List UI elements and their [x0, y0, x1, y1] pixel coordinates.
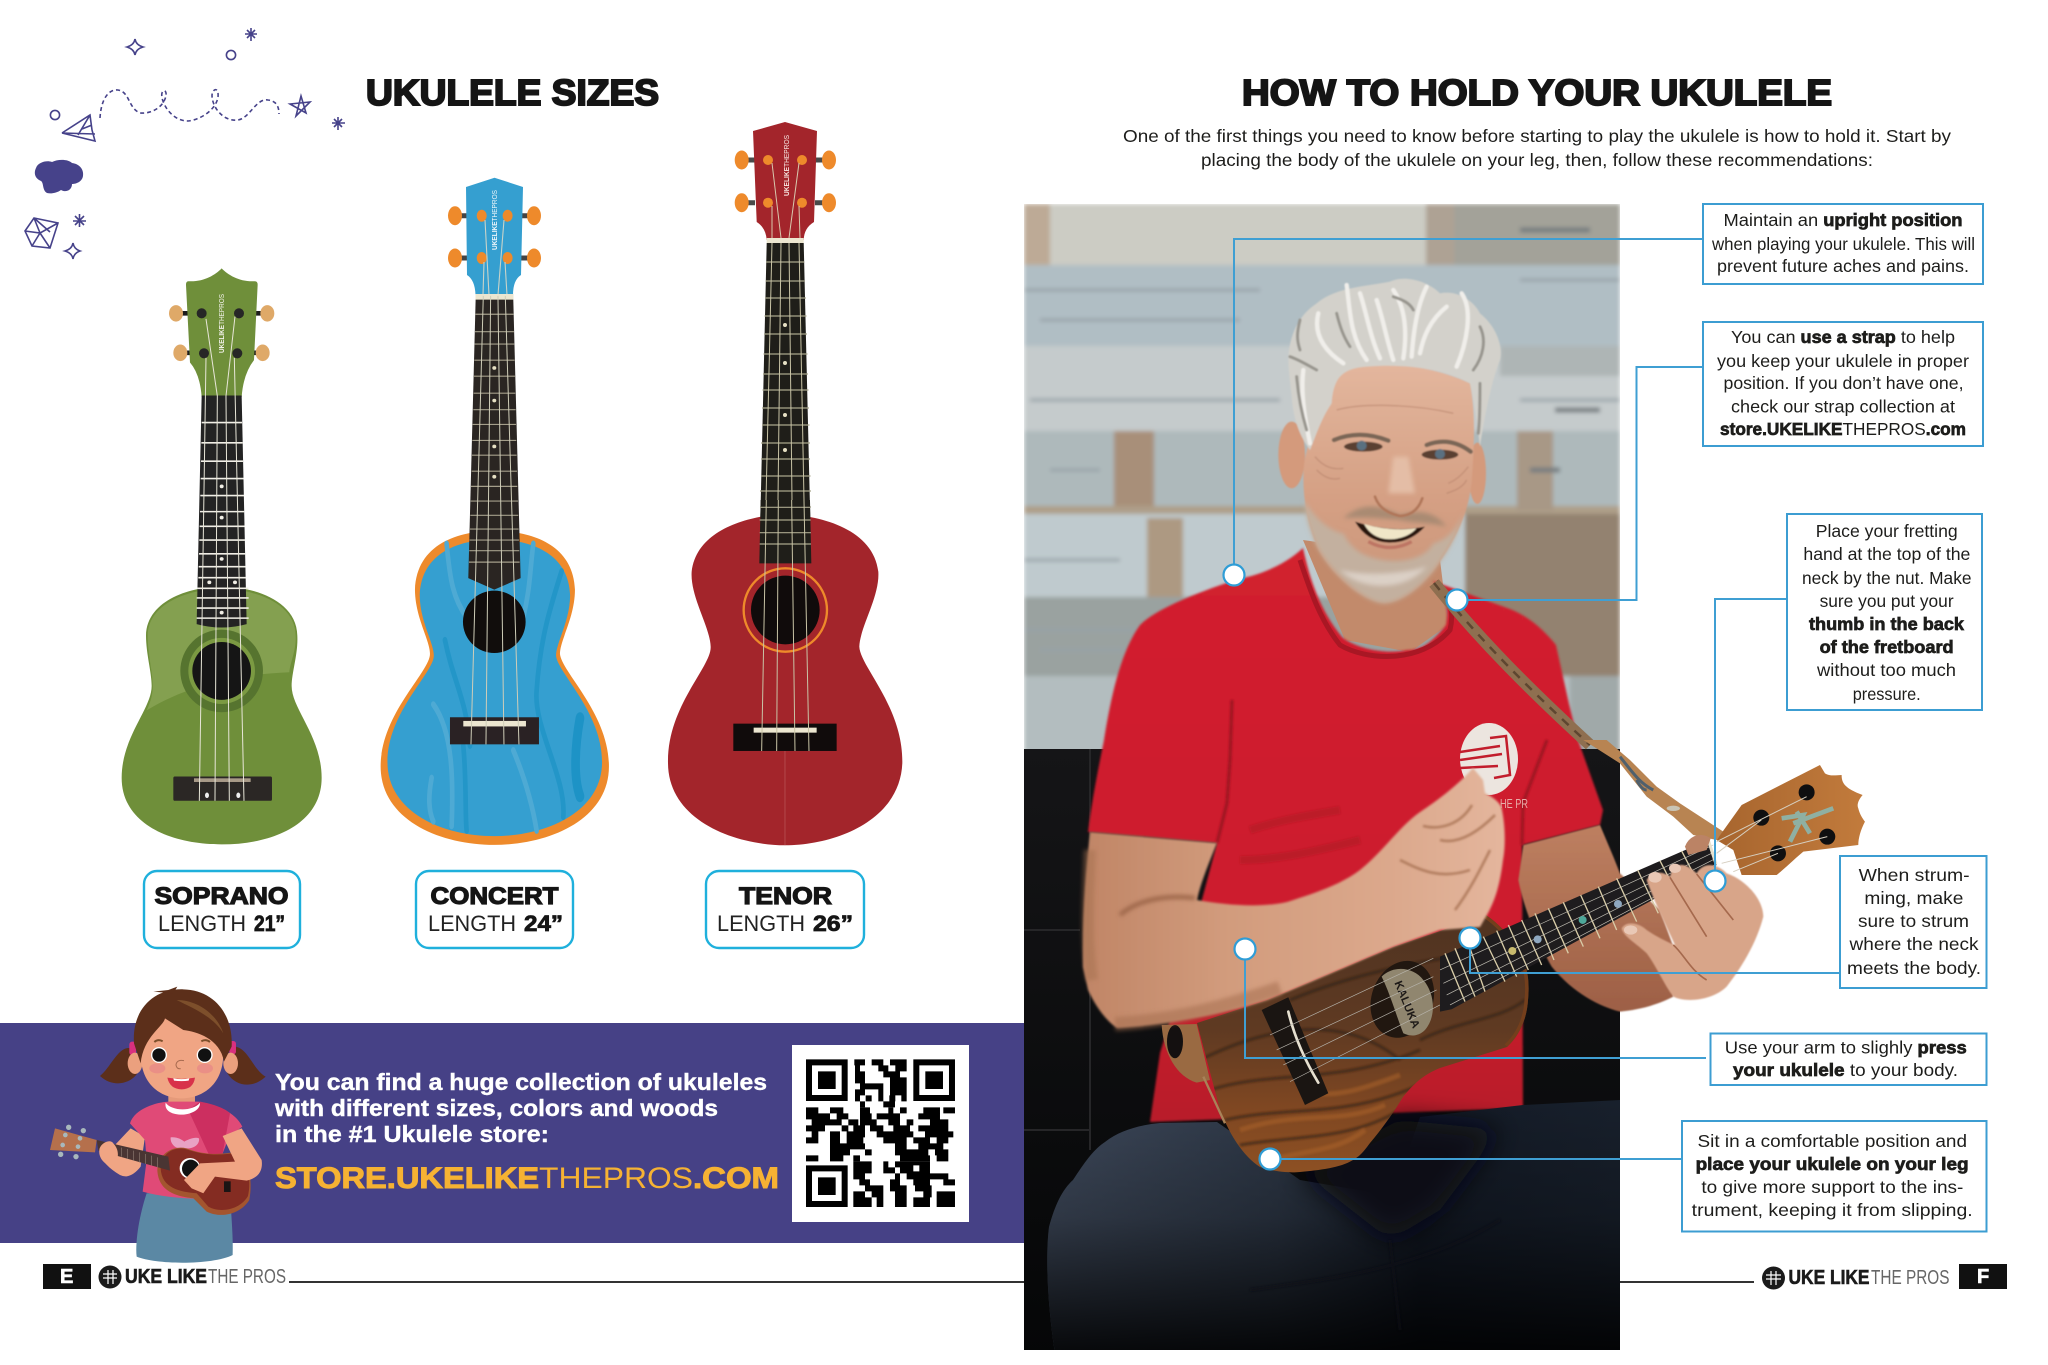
size label: tenor: TENOR: [739, 883, 832, 910]
size label: soprano: SOPRANO: [154, 883, 288, 910]
headstock: [466, 178, 523, 295]
finger gaps: [1670, 874, 1733, 980]
icon: star outline: [290, 96, 310, 116]
bow: [171, 1137, 199, 1148]
banner text: with different sizes, colors and woods: [274, 1095, 718, 1121]
heading: ukulele sizes: UKULELE SIZES: [366, 72, 659, 113]
strumming hand detail: [1400, 805, 1495, 910]
callout: leg: [1682, 1121, 1986, 1232]
headstock brand: UKELIKETHEPROS: [219, 294, 226, 353]
body wood grain: [1200, 913, 1529, 1160]
hair ties: [129, 1041, 236, 1055]
nose: [1375, 457, 1422, 516]
ukulele neck: [97, 1140, 170, 1171]
decorative doodles: [25, 28, 345, 259]
marker dots: [1224, 564, 1726, 1170]
tuning pegs: [735, 150, 836, 212]
icon: cloud: [35, 160, 83, 193]
intro paragraph: One of the first things you need to know before starting to play the ukulele is how to hold it. Start by: [1123, 126, 1951, 146]
shirt: [130, 1102, 242, 1199]
callout: strumming: sure to strum: [1858, 911, 1969, 931]
callout: use a strap: you keep your ukulele in proper: [1717, 351, 1969, 371]
soprano ukulele: [122, 268, 322, 844]
tuning pegs: [448, 206, 541, 268]
logo: UKE LIKE: [125, 1266, 207, 1288]
icon: four point star: [127, 39, 143, 55]
icon: asterisk lower: [73, 214, 86, 227]
intro paragraph: [1123, 126, 1951, 170]
collar: [165, 1103, 200, 1115]
body rim: [1483, 913, 1529, 1047]
head strings: [1717, 797, 1827, 872]
size label: tenor: 26”: [813, 911, 853, 936]
tenor ukulele: [668, 122, 902, 845]
neck: [168, 1090, 195, 1110]
strumming arm and hand: [184, 1128, 262, 1193]
callout: fretting hand: thumb in the back: [1809, 614, 1964, 634]
icon: asterisk: [245, 28, 257, 41]
callout: fretting hand: of the fretboard: [1820, 637, 1954, 657]
callout: use a strap: You can use a strap to help: [1731, 327, 1955, 347]
wood stripes: [429, 544, 580, 831]
banner text: You can find a huge collection of ukuleles: [275, 1069, 767, 1095]
page letter F: F: [1977, 1266, 1989, 1288]
callout: use a strap: position. If you don’t have one,: [1724, 373, 1964, 393]
finger nails: [1624, 864, 1681, 935]
callout: strumming: meets the body.: [1847, 958, 1981, 978]
seam: [784, 751, 786, 845]
shirt logo: [1460, 723, 1528, 811]
shirt collar shade: [1300, 560, 1452, 656]
bridge: [173, 776, 272, 801]
callout: upright position: [1703, 204, 1983, 284]
brows: [154, 1040, 210, 1042]
face: [1303, 365, 1474, 603]
banner text: in the #1 Ukulele store:: [275, 1121, 549, 1147]
icon: paper plane: [62, 115, 95, 141]
ears: [1278, 422, 1486, 504]
size label: concert: 24”: [524, 911, 563, 936]
headstock: [186, 268, 258, 397]
callout: leg: trument, keeping it from slipping.: [1692, 1200, 1973, 1220]
ukulele neck: [1440, 840, 1717, 1012]
icon: gem: [25, 218, 58, 248]
fretting hand: [1622, 835, 1763, 1000]
QR code: [792, 1045, 969, 1222]
callout: arm press: Use your arm to slighly press: [1725, 1038, 1967, 1058]
body: [668, 514, 902, 845]
hair: [1288, 279, 1501, 450]
tuning pegs: [169, 305, 274, 361]
body rim: [381, 531, 609, 845]
red t-shirt: [1088, 548, 1603, 1122]
nose: [176, 1060, 184, 1069]
store url: [275, 1162, 779, 1195]
sound hole: [463, 591, 526, 653]
store url: .COM: [693, 1162, 779, 1195]
footer rule right: [1620, 1281, 1754, 1283]
ukulele head: [50, 1128, 97, 1152]
fretboard over body: [759, 500, 811, 563]
body edge strip: [1203, 1077, 1225, 1123]
chin beard highlight: [1340, 567, 1427, 586]
logo: [1762, 1266, 1950, 1290]
strings: [762, 500, 809, 751]
connector: leg: [1270, 1158, 1682, 1160]
sound hole: [744, 568, 827, 652]
connector: strap: [1457, 367, 1702, 600]
body sheen: [147, 589, 296, 710]
callout: use a strap: store.UKELIKETHEPROS.com: [1720, 419, 1966, 439]
size label: soprano: [144, 871, 300, 948]
callout: fretting hand: neck by the nut. Make: [1802, 568, 1972, 588]
size label: concert: CONCERT: [430, 883, 559, 910]
callout: fretting hand: pressure.: [1853, 684, 1921, 704]
size label: concert: [416, 871, 573, 948]
fretboard: [197, 396, 249, 628]
ukulele headstock: [1717, 765, 1865, 875]
icon: four point star lower: [65, 243, 80, 259]
headstock brand: UKELIKETHEPROS: [492, 190, 499, 250]
size label: soprano: LENGTH: [158, 911, 246, 936]
ukulele pegs: [58, 1125, 86, 1159]
strap: [1434, 583, 1590, 745]
photo background: [1024, 204, 1620, 1359]
size label: soprano: 21”: [254, 911, 285, 936]
page letter F: [1959, 1264, 2007, 1289]
cheeks: [149, 1063, 213, 1073]
callout: leg: place your ukulele on your leg: [1696, 1154, 1969, 1174]
footer left: [43, 1264, 286, 1289]
wood plank wall: [1024, 204, 1620, 764]
callout: arm press: [1710, 1034, 1986, 1085]
sound hole: [180, 1158, 200, 1179]
head: [1278, 279, 1501, 603]
neck: [1303, 540, 1448, 652]
dashed flight path: [100, 90, 279, 121]
connector: upright position: [1234, 239, 1702, 575]
mouth: [1355, 522, 1425, 547]
skirt: [136, 1193, 233, 1263]
fretting upper arm: [1518, 825, 1673, 1012]
bridge: [224, 1181, 231, 1192]
connector: fretting hand: [1715, 599, 1787, 881]
icon: small circle: [226, 50, 236, 60]
photo: man holding ukulele: [1024, 204, 1865, 1360]
callout: upright position: Maintain an upright position: [1724, 210, 1962, 230]
bridge: [733, 724, 837, 751]
store url: THEPROS: [539, 1162, 693, 1195]
arm shading: [1088, 850, 1280, 1024]
tuning posts: [477, 210, 513, 264]
strings: [199, 317, 244, 801]
connector: strumming: [1470, 938, 1840, 973]
concert ukulele: [381, 178, 609, 845]
size label: tenor: LENGTH: [717, 911, 805, 936]
nut: [476, 294, 514, 300]
trousers: [1047, 1100, 1620, 1360]
icon: small circle left: [50, 110, 60, 120]
beard: [1304, 500, 1464, 603]
heading: how to hold: HOW TO HOLD YOUR UKULELE: [1242, 72, 1832, 113]
head: [128, 1013, 238, 1098]
callout: fretting hand: hand at the top of the: [1803, 544, 1970, 564]
callout: use a strap: [1703, 322, 1983, 446]
page letter E: [43, 1264, 91, 1289]
saddle: [1288, 1012, 1318, 1083]
eyes: [151, 1047, 213, 1063]
body top: [387, 539, 602, 836]
tuft: [153, 987, 177, 993]
upper strings: [766, 243, 804, 500]
store url: STORE.UKELIKE: [275, 1162, 539, 1195]
arm left: [99, 1128, 145, 1176]
callout: strumming: [1840, 856, 1986, 988]
callout: fretting hand: Place your fretting: [1816, 521, 1958, 541]
logo: [98, 1266, 286, 1288]
headstock: [753, 122, 817, 240]
callout: leg: to give more support to the ins-: [1701, 1177, 1964, 1197]
nut: [767, 238, 804, 243]
callout: strumming: When strum-: [1859, 865, 1970, 885]
banner text: [274, 1069, 767, 1147]
hair: [134, 989, 232, 1063]
ukulele body: [157, 1148, 251, 1215]
bridge: [1262, 997, 1328, 1105]
callout: fretting hand: sure you put your: [1820, 591, 1954, 611]
callout: upright position: when playing your ukulele. This will: [1711, 234, 1975, 254]
tuning posts: [197, 308, 244, 358]
callout: upright position: prevent future aches and pains.: [1717, 256, 1969, 276]
purple store banner: [0, 1023, 1024, 1243]
callout: strumming: where the neck: [1848, 934, 1979, 954]
strings: [1270, 958, 1440, 1082]
logo: THE PROS: [1871, 1267, 1950, 1289]
footer right: [1620, 1264, 2007, 1290]
mouth: [167, 1078, 195, 1089]
strap pattern: [1434, 583, 1590, 745]
hair strands: [1290, 285, 1483, 443]
headstock pegs: [1753, 784, 1835, 861]
fretting hand: [99, 1141, 118, 1166]
sound hole: [180, 630, 263, 712]
strumming arm: [1083, 768, 1505, 1028]
footer rule left: [289, 1281, 1024, 1283]
ukulele body: [1197, 913, 1529, 1172]
ukulele side pouch: [1162, 1024, 1210, 1083]
callout: fretting hand: [1787, 514, 1982, 710]
body: [122, 586, 322, 844]
shirt folds and sleeve seams: [1217, 700, 1547, 860]
size label: concert: LENGTH: [428, 911, 516, 936]
illustration: girl with ukulele: [50, 987, 266, 1263]
callout: arm press: your ukulele to your body.: [1733, 1060, 1958, 1080]
headstock brand: UKELIKETHEPROS: [784, 135, 791, 196]
bridge: [450, 717, 539, 744]
head strings: [772, 163, 800, 238]
couch: [1024, 749, 1620, 1359]
connector: arm press: [1245, 949, 1706, 1058]
tuning posts: [763, 155, 807, 208]
shirt shade: [188, 1102, 230, 1198]
lower strap: [1583, 740, 1723, 840]
intro paragraph: placing the body of the ukulele on your leg, then, follow these recommendations:: [1201, 150, 1873, 170]
cheek wrinkles: [1315, 405, 1468, 493]
moustache: [1343, 507, 1447, 527]
sound hole: [1360, 952, 1445, 1047]
callout: fretting hand: without too much: [1816, 660, 1956, 680]
fretboard: [468, 300, 521, 590]
callout: leg: Sit in a comfortable position and: [1698, 1131, 1967, 1151]
shirt logo: HE PR: [1500, 796, 1528, 811]
callout: strumming: ming, make: [1864, 888, 1963, 908]
eyes: [1344, 441, 1458, 460]
pigtails: [100, 1047, 266, 1085]
headstock inlay: [1782, 808, 1833, 842]
callout: use a strap: check our strap collection at: [1731, 396, 1955, 416]
hair highlight: [177, 1000, 223, 1033]
logo: THE PROS: [208, 1266, 286, 1288]
strings: [471, 296, 519, 744]
icon: asterisk right: [332, 117, 345, 130]
soundhole label: KALUKA: [1392, 979, 1421, 1030]
logo: UKE LIKE: [1788, 1267, 1870, 1289]
page letter E: E: [60, 1266, 73, 1288]
fretboard neck: [759, 243, 811, 563]
brows: [1334, 435, 1471, 452]
size label: tenor: [706, 871, 864, 948]
head strings: [483, 220, 507, 295]
